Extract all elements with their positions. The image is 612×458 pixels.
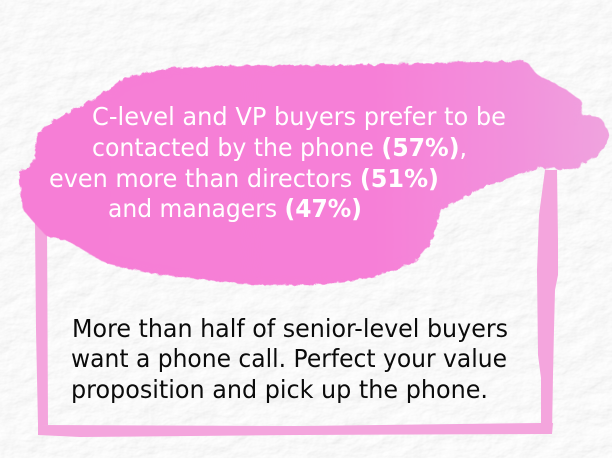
body text in frame bbox=[71, 314, 508, 404]
headline text on blob: even more than directors (51%) bbox=[49, 164, 439, 193]
headline text on blob bbox=[49, 102, 506, 223]
watercolor wash mottling bbox=[22, 65, 607, 281]
headline text on blob: contacted by the phone (57%), bbox=[92, 133, 467, 162]
body text in frame: More than half of senior-level buyers bbox=[72, 314, 508, 343]
headline text on blob: C-level and VP buyers prefer to be bbox=[92, 102, 506, 131]
headline text on blob: and managers (47%) bbox=[108, 194, 362, 223]
body text in frame: proposition and pick up the phone. bbox=[71, 375, 488, 404]
pink hand-drawn frame bbox=[35, 170, 558, 437]
body text in frame: want a phone call. Perfect your value bbox=[71, 344, 507, 373]
watercolor blob bbox=[18, 61, 611, 285]
